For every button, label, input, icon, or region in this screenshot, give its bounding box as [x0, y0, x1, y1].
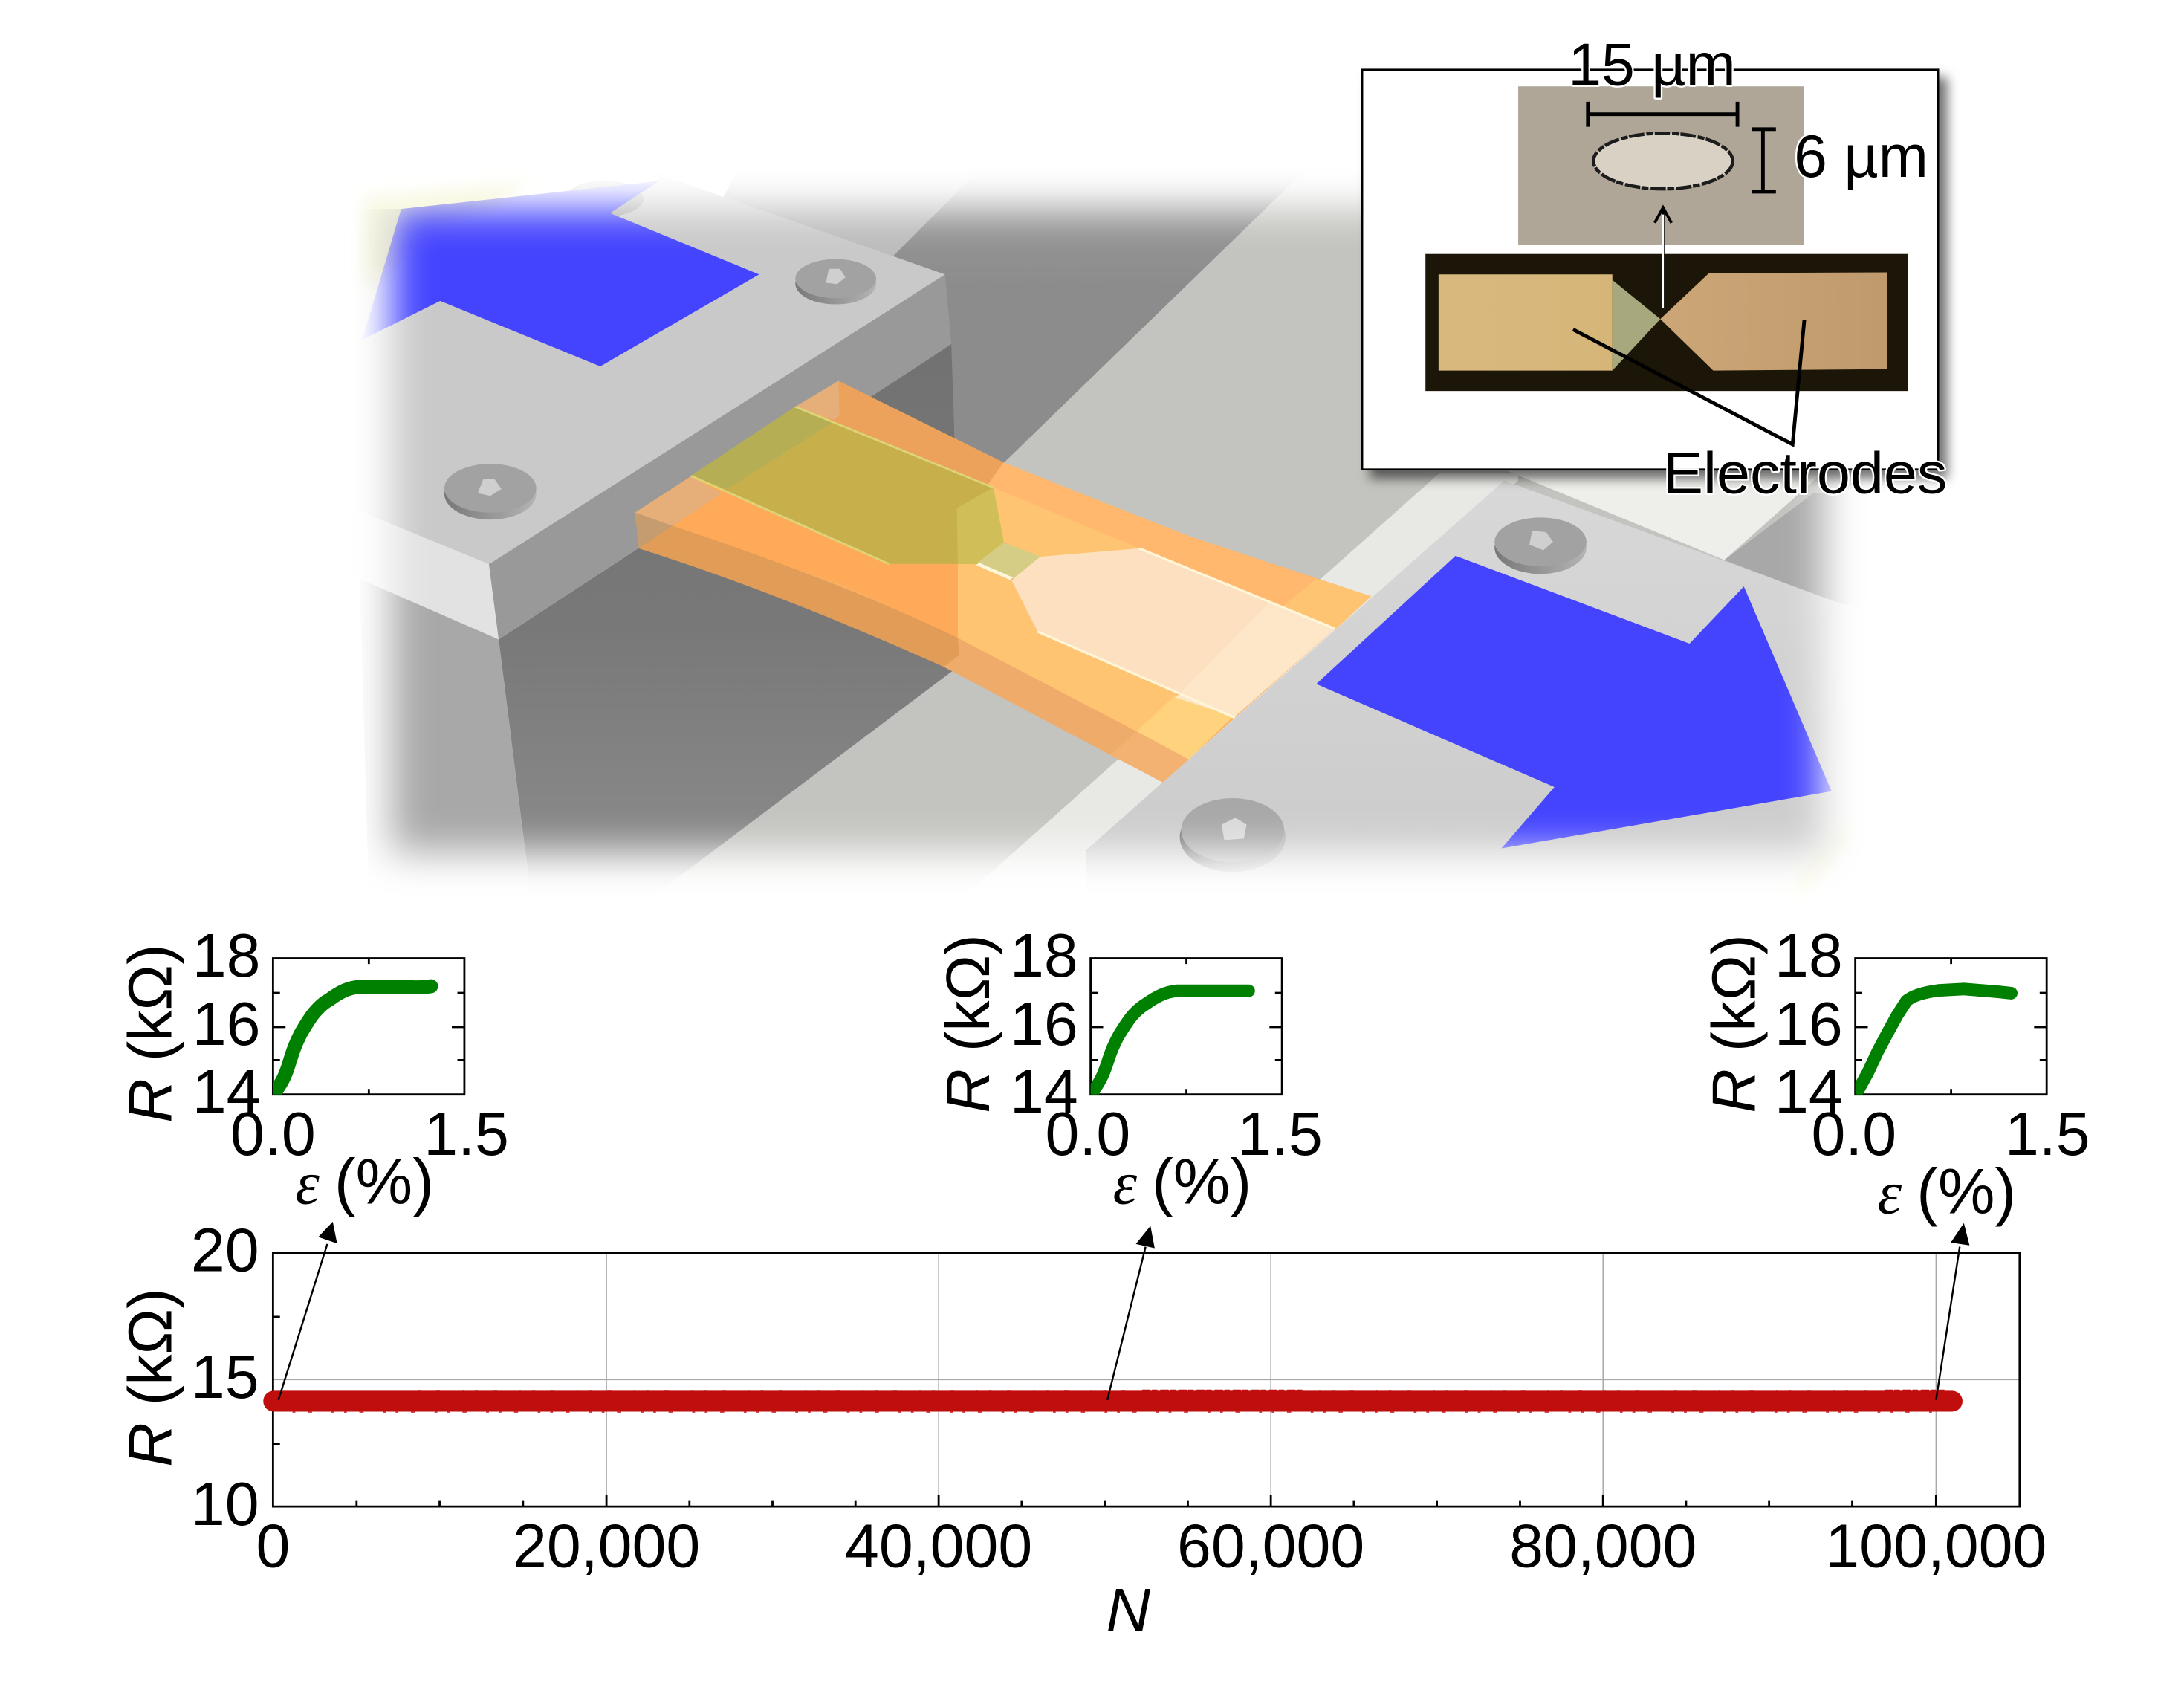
green curve [1092, 991, 1248, 1092]
plot frame with ticks [273, 959, 464, 1095]
floor and background bands [684, 183, 1847, 874]
x tick labels [1046, 1100, 1323, 1168]
film: portion lying under the clamp [635, 381, 840, 525]
main chart: R vs cycle number N [117, 1216, 2047, 1645]
arrow: first cycle to inset [279, 1222, 337, 1400]
micrograph: electrode pair [1425, 254, 1908, 391]
x axis label: (%) [334, 1146, 434, 1217]
y tick labels: 20 [191, 1216, 259, 1284]
x tick labels: 60,000 [1177, 1512, 1364, 1581]
y tick labels: 15 [191, 1343, 259, 1411]
y tick labels: 18 [1775, 922, 1843, 990]
right light electrode [1011, 548, 1335, 718]
y tick labels: 10 [191, 1470, 259, 1538]
flexible orange film [635, 381, 1371, 783]
left gold electrode [691, 407, 1004, 564]
x axis label: ε [295, 1149, 320, 1217]
film: thick side edge [635, 513, 1189, 783]
green curve [275, 986, 431, 1092]
x tick labels: 1.5 [1237, 1100, 1323, 1168]
y axis label: R (kΩ) [117, 944, 185, 1123]
y tick labels: 16 [192, 990, 261, 1058]
x tick labels: 80,000 [1509, 1512, 1697, 1581]
3D illustration: film stretched between two clamps [363, 181, 1847, 880]
x axis label: ε [1113, 1149, 1138, 1217]
screw: right clamp front [1180, 798, 1286, 872]
x tick labels: 0.0 [230, 1100, 316, 1168]
red data band [273, 1390, 1952, 1412]
film: base outline [635, 381, 1371, 783]
inset plot 3: R vs strain at 100,000 cycles [1700, 922, 2090, 1228]
scale bar: 15 um [1588, 102, 1737, 127]
arrow: 100,000 cycles to inset [1936, 1223, 1969, 1400]
y axis label: R (kΩ) [1700, 934, 1769, 1113]
left clamp [367, 190, 954, 880]
green curve [1858, 989, 2012, 1090]
y tick labels: 16 [1010, 990, 1078, 1058]
x tick labels: 40,000 [845, 1512, 1032, 1581]
micrograph: elliptical hole [1518, 86, 1804, 245]
arrow: zoom from gap to hole [1655, 207, 1671, 308]
y tick labels [1010, 922, 1078, 1126]
x tick labels: 1.5 [424, 1100, 509, 1168]
y tick labels [192, 922, 261, 1126]
x axis label: N [1106, 1576, 1150, 1645]
y axis label: R (kΩ) [117, 1288, 185, 1467]
y tick labels: 18 [192, 922, 261, 990]
label: 15 um: 15 µm [1568, 31, 1736, 98]
x axis label: (%) [1152, 1146, 1251, 1217]
y tick labels: 18 [1010, 922, 1078, 990]
screw: right clamp back [1494, 517, 1587, 574]
y tick labels [1775, 922, 1843, 1126]
x axis label: ε [1878, 1159, 1902, 1227]
leader lines to electrodes [1573, 320, 1804, 444]
label: Electrodes: Electrodes [1663, 441, 1947, 506]
right clamp [1086, 481, 1841, 871]
inset panel: micrographs of the device [1362, 31, 1947, 506]
inset frame [1362, 70, 1938, 470]
faint yellow glow corners [365, 184, 1850, 892]
arrow: left pull direction [362, 181, 759, 366]
x tick labels: 20,000 [513, 1512, 700, 1581]
plot frame with ticks [273, 1253, 2020, 1506]
x tick labels [230, 1100, 509, 1168]
screw: left clamp back [569, 184, 644, 216]
screw: left clamp right [795, 259, 876, 305]
x tick labels [1811, 1100, 2090, 1168]
y tick labels: 14 [1775, 1058, 1843, 1126]
x tick labels: 100,000 [1825, 1512, 2047, 1581]
x tick labels: 0 [256, 1512, 290, 1581]
inset plot 2: R vs strain at 50,000 cycles [934, 922, 1323, 1217]
x tick labels [256, 1512, 2047, 1581]
scale bar: 6 um [1752, 129, 1776, 192]
plot frame with ticks [1856, 959, 2047, 1095]
arrow: right pull direction [1316, 556, 1832, 848]
inset plot 1: R vs strain at start [117, 922, 509, 1217]
y tick labels: 14 [1010, 1058, 1078, 1126]
film: central surface [673, 480, 1235, 760]
x axis label: (%) [1916, 1156, 2016, 1228]
gauge section [978, 543, 1040, 579]
x tick labels: 0.0 [1046, 1100, 1130, 1168]
y tick labels: 16 [1775, 990, 1843, 1058]
label: 6 um: 6 µm [1794, 123, 1928, 190]
y tick labels: 14 [192, 1058, 261, 1126]
y axis label: R (kΩ) [934, 934, 1002, 1113]
plot frame with ticks [1091, 959, 1282, 1095]
film: top edge strip [824, 381, 1371, 630]
screw: left clamp front [444, 464, 537, 519]
x tick labels: 1.5 [2005, 1100, 2090, 1168]
x tick labels: 0.0 [1811, 1100, 1896, 1168]
y tick labels [191, 1216, 259, 1538]
arrow: 50,000 cycles to inset [1107, 1226, 1155, 1400]
